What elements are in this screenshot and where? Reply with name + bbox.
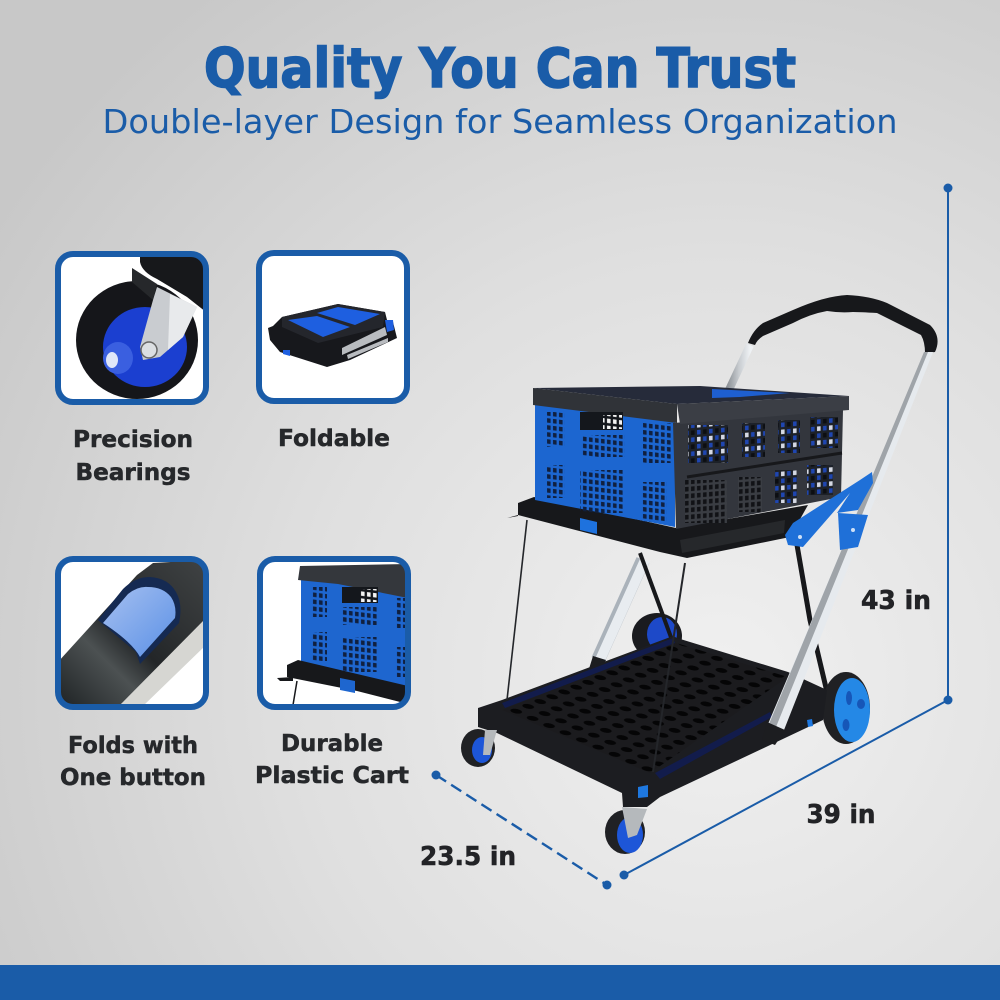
crate dark side bbox=[673, 410, 843, 529]
label: foldable: Foldable bbox=[278, 426, 390, 452]
label: durable plastic cart: Durable bbox=[281, 731, 383, 757]
upper tray bbox=[507, 497, 808, 558]
label: precision bearings bbox=[73, 427, 193, 486]
front cross brace bbox=[640, 553, 672, 640]
label: durable plastic cart bbox=[255, 731, 409, 789]
rear cross brace bbox=[797, 545, 827, 692]
crate blue side bbox=[535, 403, 675, 527]
label: folds with one button: Folds with bbox=[68, 733, 198, 759]
crate rim bbox=[533, 388, 677, 423]
dimension: height line bbox=[944, 184, 952, 704]
bottom band bbox=[0, 965, 1000, 1000]
main right post bbox=[762, 352, 933, 745]
feature card: one button bbox=[58, 559, 206, 707]
upper left post bbox=[728, 345, 750, 392]
big rear wheel bbox=[822, 672, 870, 744]
dimension: length line bbox=[620, 700, 948, 880]
crate opening bbox=[533, 386, 849, 404]
feature card: foldable bbox=[259, 253, 407, 401]
label: precision bearings: Precision bbox=[73, 427, 193, 453]
dark side windows bbox=[685, 417, 838, 523]
crate hinge bbox=[687, 453, 842, 477]
dimension: width line bbox=[432, 770, 612, 890]
lower deck bbox=[478, 636, 827, 807]
back wheel bbox=[632, 613, 682, 659]
blue side windows bbox=[547, 412, 672, 522]
label: folds with one button: One button bbox=[60, 765, 206, 791]
left curved support bbox=[598, 560, 645, 660]
handlebar bbox=[748, 295, 938, 353]
crate bbox=[533, 386, 849, 529]
front caster bbox=[605, 807, 647, 854]
label: durable plastic cart: Plastic Cart bbox=[255, 763, 409, 789]
label: precision bearings: Bearings bbox=[76, 460, 190, 486]
label: 43 in: 43 in bbox=[861, 586, 931, 616]
label: folds with one button bbox=[60, 733, 206, 791]
subtitle: Double-layer Design for Seamless Organization bbox=[102, 102, 898, 141]
support cord right bbox=[653, 563, 685, 772]
label: 39 in: 39 in bbox=[806, 800, 876, 830]
cart illustration bbox=[461, 295, 938, 854]
crate interior blue wall bbox=[712, 389, 790, 398]
left caster bbox=[461, 729, 497, 767]
title: Quality You Can Trust bbox=[204, 37, 796, 100]
label: 23.5 in: 23.5 in bbox=[420, 842, 516, 872]
feature card: precision bearings bbox=[58, 254, 206, 402]
blue folding bracket bbox=[785, 472, 873, 550]
support foot bbox=[588, 656, 606, 672]
feature card: durable plastic cart bbox=[260, 559, 408, 707]
support cord left bbox=[507, 520, 527, 700]
